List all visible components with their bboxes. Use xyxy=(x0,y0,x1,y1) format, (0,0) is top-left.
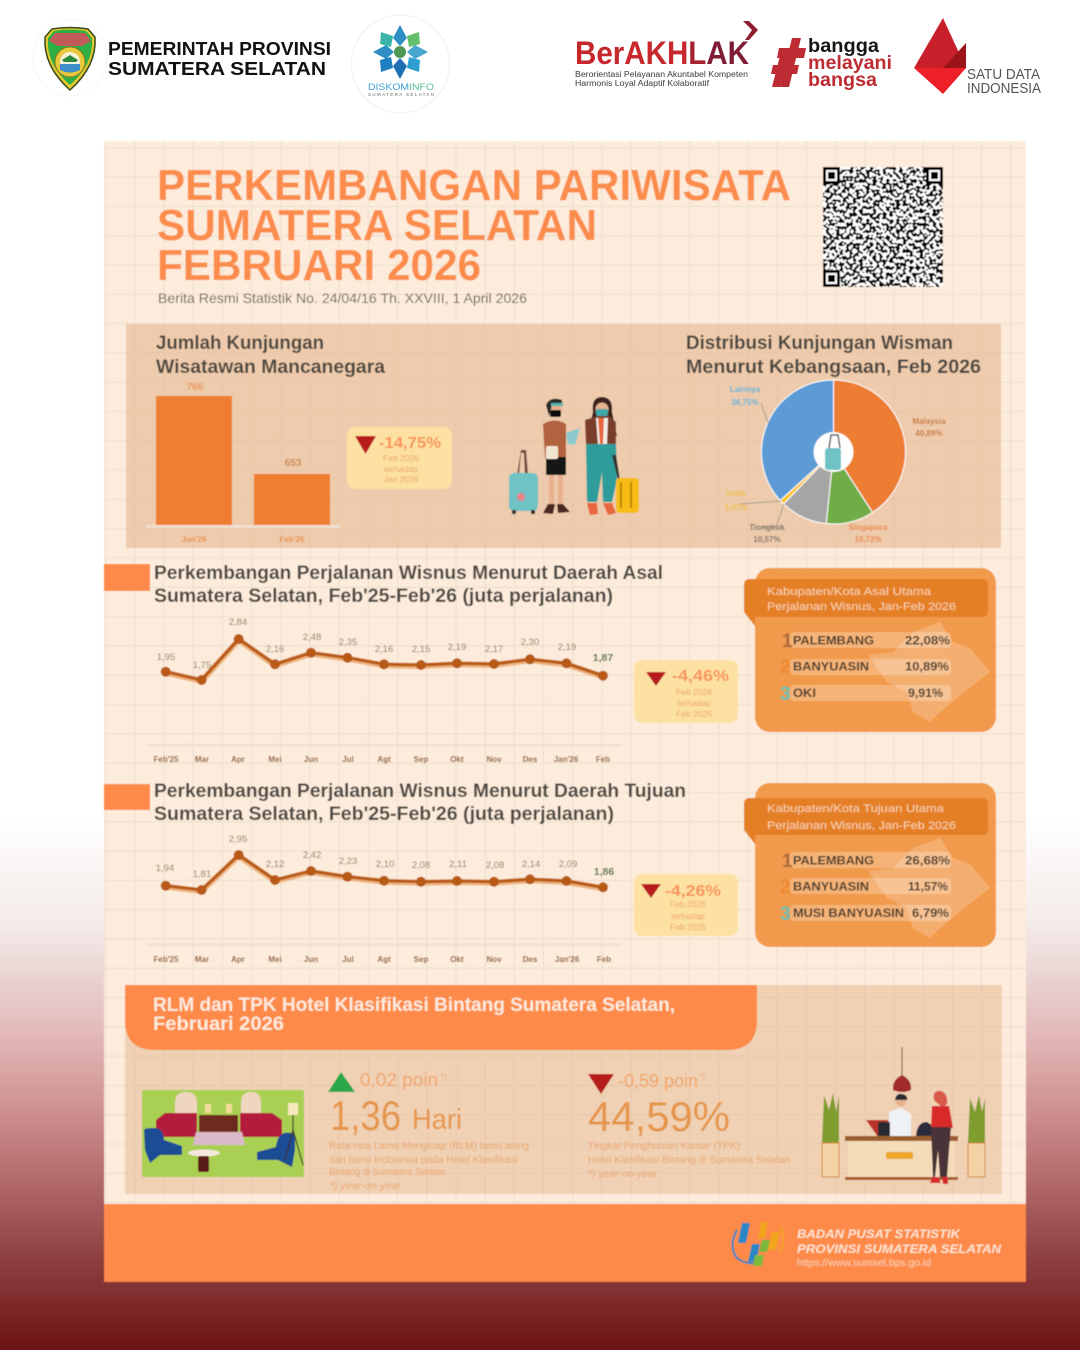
icon: bps logo xyxy=(732,1222,784,1266)
line chart: daerah asal: Des xyxy=(523,755,538,764)
line chart: daerah tujuan: Mei xyxy=(268,955,282,964)
callout: -4,46%: -4,46% xyxy=(672,668,729,685)
line chart: daerah tujuan: Jan'26 xyxy=(555,955,580,964)
callout: -14,75%: -14,75% xyxy=(379,435,441,452)
illustration: hotel reception xyxy=(822,1047,985,1184)
bar chart: kunjungan wisman: 653 xyxy=(285,458,302,469)
illustration: hotel room xyxy=(142,1090,304,1177)
heading: distribusi: Menurut Kebangsaan, Feb 2026 xyxy=(686,357,981,378)
line chart: daerah tujuan: 2,08 xyxy=(412,860,430,871)
line chart: daerah asal: Apr xyxy=(231,755,245,764)
callout: -4,26%: Feb 2025 xyxy=(670,922,706,932)
line chart: daerah asal: 2,16 xyxy=(375,644,393,655)
heading: jumlah kunjungan: Wisatawan Mancanegara xyxy=(156,357,385,378)
icon: qr code xyxy=(823,167,943,287)
heading: distribusi xyxy=(686,333,981,378)
pie chart: kebangsaan: Malaysia xyxy=(912,417,946,426)
stat: rlm xyxy=(328,1070,529,1192)
icon: provincial crest xyxy=(33,20,107,96)
line chart: daerah asal: 2,84 xyxy=(229,617,247,628)
heading: daerah asal: Sumatera Selatan, Feb'25-Feb'26 (juta perjalanan) xyxy=(154,586,613,607)
callout: -14,75%: Jan 2026 xyxy=(384,474,419,484)
line chart: daerah tujuan: 2,42 xyxy=(303,850,321,861)
footer band xyxy=(104,1204,1026,1282)
text: bps identity: https://www.sumsel.bps.go.id xyxy=(797,1258,931,1269)
line chart: daerah tujuan: 2,09 xyxy=(559,859,577,870)
stat: rlm: 0,02 poin xyxy=(360,1070,438,1090)
logo: bangga melayani bangsa: melayani xyxy=(808,53,892,74)
card: kabupaten kota asal: PALEMBANG xyxy=(793,636,874,648)
heading: daerah asal: Perkembangan Perjalanan Wisnus Menurut Daerah Asal xyxy=(154,563,663,584)
line chart: daerah tujuan: 1,81 xyxy=(193,869,211,880)
text: bps identity xyxy=(797,1227,1001,1269)
line chart: daerah tujuan: 2,23 xyxy=(339,856,357,867)
line chart: daerah tujuan: Agt xyxy=(377,955,391,964)
card: kabupaten kota asal: BANYUASIN xyxy=(793,662,869,674)
section: wisnus daerah asal xyxy=(104,563,996,764)
line chart: daerah tujuan: Des xyxy=(523,955,538,964)
heading: jumlah kunjungan: Jumlah Kunjungan xyxy=(156,333,324,354)
line chart: daerah asal: 2,30 xyxy=(521,637,539,648)
stat: rlm: Bintang di Sumatera Selatan xyxy=(329,1167,446,1178)
card: kabupaten kota tujuan: 3 xyxy=(780,904,791,925)
line chart: daerah tujuan: 2,95 xyxy=(229,834,247,845)
stat: tpk: -0,59 poin xyxy=(618,1071,698,1091)
stat: tpk: *) xyxy=(699,1072,705,1081)
logo: satu data indonesia: SATU DATA xyxy=(967,67,1040,83)
pie chart: kebangsaan: 40,89% xyxy=(915,429,943,438)
card: kabupaten kota tujuan: 26,68% xyxy=(905,856,950,868)
logo: satu data indonesia: INDONESIA xyxy=(967,81,1041,97)
card: kabupaten kota tujuan: 11,57% xyxy=(908,882,948,894)
logo: berakhlak: BerAKHLAK xyxy=(575,35,749,71)
logo: berakhlak: Harmonis Loyal Adaptif Kolaboratif xyxy=(575,79,710,88)
text: bps identity: BADAN PUSAT STATISTIK xyxy=(797,1227,961,1241)
card: kabupaten kota asal: 1 xyxy=(782,631,793,652)
line chart: daerah tujuan: Jun xyxy=(304,955,318,964)
stat: tpk: Tingkat Penghunian Kamar (TPK) xyxy=(588,1141,740,1152)
callout: -4,26%: -4,26% xyxy=(665,883,721,900)
stat: tpk: *) year-on-year xyxy=(588,1169,658,1180)
line chart: daerah asal: Nov xyxy=(486,755,502,764)
card: kabupaten kota tujuan: 1 xyxy=(782,851,793,872)
card: kabupaten kota asal: Kabupaten/Kota Asal Utama xyxy=(767,586,932,598)
line chart: daerah tujuan: Apr xyxy=(231,955,245,964)
card: kabupaten kota tujuan: BANYUASIN xyxy=(793,882,869,894)
line chart: daerah tujuan: Sep xyxy=(414,955,428,964)
pie chart: kebangsaan: 10,72% xyxy=(854,535,882,544)
heading: daerah asal xyxy=(154,563,663,607)
callout: -4,26% xyxy=(634,874,738,936)
tab marker xyxy=(104,564,150,591)
line chart: daerah asal: 1,87 xyxy=(593,652,613,664)
section: wisnus daerah tujuan xyxy=(104,781,996,964)
line chart: daerah asal: Okt xyxy=(450,755,464,764)
line chart: daerah tujuan: 2,14 xyxy=(522,859,540,870)
card: kabupaten kota asal: Perjalanan Wisnus, Jan-Feb 2026 xyxy=(767,601,956,613)
line chart: daerah tujuan: Nov xyxy=(486,955,502,964)
line chart: daerah tujuan: Jul xyxy=(342,955,354,964)
card: kabupaten kota asal: 10,89% xyxy=(905,662,949,674)
heading: daerah tujuan: Sumatera Selatan, Feb'25-Feb'26 (juta perjalanan) xyxy=(154,804,614,825)
line chart: daerah asal: Jun xyxy=(304,755,318,764)
line chart: daerah asal: Feb xyxy=(596,755,610,764)
illustration: travelers xyxy=(509,397,639,515)
stat: rlm: *) xyxy=(441,1072,447,1081)
stat: rlm: 1,36 xyxy=(330,1092,401,1139)
title xyxy=(157,161,791,290)
callout: -4,46%: Feb 2026 xyxy=(676,687,712,697)
line chart: daerah asal: 2,19 xyxy=(448,642,466,653)
line chart: daerah asal: Jan'26 xyxy=(554,755,579,764)
bar chart: kunjungan wisman xyxy=(146,382,340,544)
callout: -4,46%: terhadap xyxy=(677,698,711,708)
line chart: daerah asal: Feb'25 xyxy=(153,755,179,764)
logo: diskominfo: SUMATERA SELATAN xyxy=(368,92,434,97)
logo: bangga melayani bangsa: bangga xyxy=(808,36,879,57)
heading: daerah tujuan: Perkembangan Perjalanan Wisnus Menurut Daerah Tujuan xyxy=(154,781,686,802)
tab marker xyxy=(104,784,150,810)
heading: distribusi: Distribusi Kunjungan Wisman xyxy=(686,333,953,354)
line chart: daerah tujuan: 2,08 xyxy=(486,860,504,871)
card: kabupaten kota asal: 9,91% xyxy=(908,688,943,700)
card: kabupaten kota asal: 22,08% xyxy=(905,636,950,648)
line chart: daerah tujuan: 1,94 xyxy=(156,863,174,874)
line chart: daerah tujuan: 2,12 xyxy=(266,859,284,870)
callout: -14,75%: terhadap xyxy=(384,464,418,474)
pie chart: kebangsaan xyxy=(725,380,946,544)
line chart: daerah asal: Mar xyxy=(195,755,209,764)
callout: -14,75% xyxy=(347,427,452,489)
callout: -4,46%: Feb 2025 xyxy=(676,709,712,719)
logo: diskominfo xyxy=(352,15,450,113)
card: kabupaten kota tujuan: Kabupaten/Kota Tujuan Utama xyxy=(767,803,945,815)
stat: tpk: 44,59% xyxy=(588,1093,730,1140)
stat: rlm: Hari xyxy=(412,1104,462,1136)
card: kabupaten kota tujuan: PALEMBANG xyxy=(793,856,874,868)
logo: bangga melayani bangsa: bangsa xyxy=(808,70,877,91)
card: kabupaten kota asal: 2 xyxy=(780,657,791,678)
line chart: daerah tujuan: Okt xyxy=(450,955,464,964)
logo: diskominfo: DISKOM INFO xyxy=(368,82,434,93)
logo: bangga melayani bangsa xyxy=(771,36,892,91)
heading: jumlah kunjungan xyxy=(156,333,385,378)
line chart: daerah tujuan xyxy=(147,834,622,964)
line chart: daerah asal: Jul xyxy=(342,755,354,764)
heading banner: rlm dan tpk: RLM dan TPK Hotel Klasifikasi Bintang Sumatera Selatan, xyxy=(153,995,675,1016)
line chart: daerah asal: Sep xyxy=(414,755,428,764)
bar chart: kunjungan wisman: 766 xyxy=(187,382,204,393)
text: government name: PEMERINTAH PROVINSI xyxy=(108,39,331,59)
line chart: daerah tujuan: Feb'25 xyxy=(153,955,179,964)
panel: jumlah kunjungan and distribusi xyxy=(126,324,1001,548)
line chart: daerah asal: Mei xyxy=(268,755,282,764)
line chart: daerah asal xyxy=(147,617,622,764)
logo: berakhlak xyxy=(575,21,758,88)
line chart: daerah tujuan: Feb xyxy=(597,955,611,964)
callout: -14,75%: Feb 2026 xyxy=(383,453,419,463)
line chart: daerah asal: 2,15 xyxy=(412,644,430,655)
line chart: daerah tujuan: Mar xyxy=(195,955,209,964)
pie chart: kebangsaan: Lainnya xyxy=(730,385,761,394)
bar chart: kunjungan wisman: Feb'26 xyxy=(279,535,305,544)
logo: satu data indonesia xyxy=(914,18,1041,97)
card: kabupaten kota tujuan: Perjalanan Wisnus, Jan-Feb 2026 xyxy=(767,820,956,832)
card: kabupaten kota tujuan: 2 xyxy=(780,877,791,898)
card: kabupaten kota asal: OKI xyxy=(793,688,816,700)
text: government name: SUMATERA SELATAN xyxy=(108,59,326,79)
logo: berakhlak: Berorientasi Pelayanan Akuntabel Kompeten xyxy=(575,70,748,79)
title: SUMATERA SELATAN xyxy=(157,201,597,250)
pie chart: kebangsaan: 36,75% xyxy=(731,398,759,407)
pie chart: kebangsaan: India xyxy=(727,489,746,498)
text: bps identity: PROVINSI SUMATERA SELATAN xyxy=(797,1242,1001,1256)
stat: tpk xyxy=(588,1071,790,1180)
pie chart: kebangsaan: 10,57% xyxy=(753,535,781,544)
line chart: daerah asal: 1,75 xyxy=(193,660,211,671)
line chart: daerah asal: 2,35 xyxy=(339,637,357,648)
card: kabupaten kota tujuan: MUSI BANYUASIN xyxy=(793,908,904,920)
pie chart: kebangsaan: Tiongkok xyxy=(749,523,785,532)
callout: -4,46% xyxy=(634,660,738,723)
callout: -4,26%: Feb 2026 xyxy=(670,899,706,909)
line chart: daerah asal: 2,17 xyxy=(485,644,503,655)
card: kabupaten kota tujuan xyxy=(744,783,996,947)
line chart: daerah asal: 2,48 xyxy=(303,632,321,643)
heading banner: rlm dan tpk: Februari 2026 xyxy=(153,1014,284,1035)
pie chart: kebangsaan: 1,07% xyxy=(725,503,747,512)
stat: rlm: Rata-rata Lama Menginap (RLM) tamu asing xyxy=(329,1141,529,1152)
card: kabupaten kota tujuan: 6,79% xyxy=(912,908,949,920)
pie chart: kebangsaan: Singapura xyxy=(848,523,888,532)
title: PERKEMBANGAN PARIWISATA xyxy=(157,161,791,210)
card: kabupaten kota asal xyxy=(744,568,996,732)
line chart: daerah tujuan: 1,86 xyxy=(594,866,614,878)
line chart: daerah tujuan: 2,10 xyxy=(376,859,394,870)
stat: rlm: dan tamu Indonesia pada Hotel Klasifikasi xyxy=(329,1155,518,1166)
line chart: daerah asal: 2,16 xyxy=(266,644,284,655)
text: government name xyxy=(108,39,331,79)
heading banner: rlm dan tpk xyxy=(125,985,757,1050)
subtitle: Berita Resmi Statistik No. 24/04/16 Th. XXVIII, 1 April 2026 xyxy=(158,290,527,306)
logo: pemerintah provinsi sumatera selatan xyxy=(33,20,331,96)
stat: tpk: Hotel Klasifikasi Bintang di Sumatera Selatan xyxy=(588,1155,790,1166)
line chart: daerah tujuan: 2,11 xyxy=(449,859,467,870)
title: FEBRUARI 2026 xyxy=(157,241,481,290)
panel: infographic xyxy=(104,141,1026,1282)
heading: daerah tujuan xyxy=(154,781,686,825)
line chart: daerah asal: Agt xyxy=(377,755,391,764)
line chart: daerah asal: 1,95 xyxy=(157,652,175,663)
stat: rlm: *) year-on-year xyxy=(330,1181,402,1192)
bar chart: kunjungan wisman: Jan'26 xyxy=(182,535,207,544)
card: kabupaten kota asal: 3 xyxy=(780,684,791,705)
line chart: daerah asal: 2,19 xyxy=(558,642,576,653)
callout: -4,26%: terhadap xyxy=(671,911,705,921)
panel: rlm dan tpk hotel xyxy=(125,985,1002,1194)
